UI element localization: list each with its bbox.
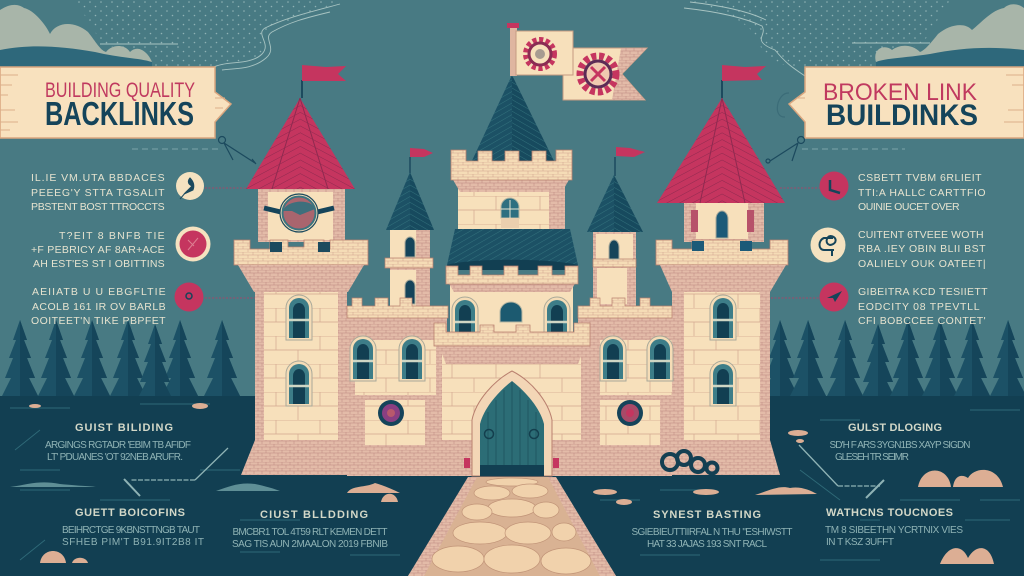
- caption: gulst dloging: [830, 422, 970, 463]
- right text block 3: [858, 286, 988, 327]
- front battlement: [434, 323, 590, 346]
- left text block 2: AH EST'ES ST I OBITTINS: [33, 258, 165, 270]
- caption: ciust blldding: SAG TIS AUN 2MAALON 2019 FBNIB: [232, 539, 388, 550]
- left wing: [347, 298, 448, 476]
- key right: [766, 93, 905, 163]
- key left: [132, 136, 256, 164]
- caption: guett boicofins: GUETT BOICOFINS: [75, 507, 185, 519]
- forest right: [762, 320, 1024, 400]
- right small flag: [615, 147, 645, 176]
- keep body: [450, 282, 573, 340]
- gate posts: [464, 458, 559, 468]
- left tower body: [241, 268, 363, 475]
- right tower: [656, 65, 788, 475]
- left text block 3: ACOLB 161 IR OV BARLB: [32, 301, 166, 313]
- ground: [0, 396, 1024, 576]
- right banner heading: BROKEN LINK: [823, 79, 977, 106]
- icon: crimson hook: [820, 172, 848, 200]
- left text block 1: IL.IE VM.UTA BBDACES: [31, 172, 165, 184]
- left banner heading: BUILDING QUALITY: [45, 79, 195, 102]
- dotted connectors left: [205, 188, 278, 298]
- right text block 3: EODCITY 08 TPEVTLL: [858, 301, 980, 313]
- caption: synest basting: [632, 509, 792, 550]
- right text block 2: [858, 229, 986, 270]
- caption: wathcns touchoes: TM 8 SIBEETHN YCRTNIX VIES: [825, 525, 963, 536]
- center window: [501, 198, 519, 228]
- left text block 3: AEIIATB U U EBGFLTIE: [32, 286, 166, 298]
- right text block 3: GIBEITRA KCD TESIIETT: [858, 286, 988, 298]
- caption: wathcns touchoes: [825, 507, 963, 548]
- left tower roof: [246, 98, 355, 189]
- center spire: [470, 75, 556, 165]
- gate arch: [472, 371, 552, 476]
- caption: guett boicofins: [62, 507, 204, 548]
- left text block 1: PEEEG'Y STTA TGSALIT: [31, 187, 165, 199]
- caption: ciust blldding: [232, 509, 388, 550]
- swallowtail flag: [563, 48, 647, 100]
- gear two: [580, 56, 616, 92]
- right tower battlement: [656, 240, 788, 292]
- left banner heading: BACKLINKS: [45, 95, 194, 132]
- caption: wathcns touchoes: IN T KSZ 3UFFT: [826, 537, 894, 548]
- icon: leaf: [176, 172, 204, 200]
- caption: guett boicofins: BEIHRCTGE 9KBNSTTNGB TAUT: [62, 525, 200, 536]
- left small flag: [410, 148, 433, 176]
- left banner: [0, 67, 231, 138]
- dotted connectors right: [750, 188, 820, 298]
- caption: guett boicofins: SFHEB PIM'T B91.9IT2B8 IT: [62, 537, 204, 548]
- gate block: [434, 323, 590, 476]
- left text block 1: [31, 172, 165, 213]
- caption: guist building: [45, 422, 191, 463]
- right banner: [789, 67, 1024, 138]
- caption: synest basting: SGIEBIEUTTIIRFAL N THU "ESHIWSTT: [632, 527, 792, 538]
- icon: link glyph: [810, 228, 846, 262]
- caption: wathcns touchoes: WATHCNS TOUCNOES: [826, 507, 953, 519]
- keep battlement: [446, 266, 578, 284]
- wing windows: [350, 336, 673, 381]
- caption: guist building: GUIST BILIDING: [75, 422, 173, 434]
- right text block 2: RBA .IEY OBIN BLII BST: [858, 243, 986, 255]
- right tower flag: [722, 65, 766, 98]
- left tower windows: [286, 295, 312, 340]
- top flags: [507, 23, 647, 100]
- pole: [507, 23, 519, 76]
- left tower battlement: [234, 240, 368, 292]
- right text block 3: CFI BOBCCEE CONTET': [858, 315, 986, 327]
- caption: gulst dloging: SD'H F ARS 3YGN1BS XAYP SIGDN: [830, 440, 970, 451]
- keep windows: [452, 297, 570, 342]
- left small windows: [405, 237, 415, 304]
- right text block 2: CUITENT 6TVEEE WOTH: [858, 229, 984, 241]
- caption: gulst dloging: GULST DLOGING: [848, 422, 942, 434]
- caption: gulst dloging: GLESEH TR SEIMR: [835, 452, 909, 463]
- right small roof: [587, 175, 643, 232]
- medallion left: [378, 400, 404, 426]
- gear one: [526, 40, 554, 68]
- caption: ciust blldding: CIUST BLLDDING: [260, 509, 368, 521]
- cloud and mountains right: [875, 4, 1024, 67]
- left text block 3: OOITEET'N TIKE PBPFET: [31, 315, 166, 327]
- right tower upper window: [691, 210, 754, 238]
- caption: ciust blldding: BMCBR1 TOL 4T59 RLT KEMEN DETT: [232, 527, 388, 538]
- right tower windows: [710, 295, 736, 340]
- left text block 2: +F PEBRICY AF 8AR+ACE: [31, 244, 165, 256]
- right text block 2: OALIIELY OUK OATEET|: [858, 258, 986, 270]
- connector arrow left: [124, 448, 228, 496]
- gate door: [480, 381, 544, 476]
- center battlement: [451, 150, 572, 180]
- dotted sky texture right: [690, 0, 950, 68]
- center tower body: [458, 178, 565, 232]
- medallion right: [617, 400, 643, 426]
- banner flag: [516, 31, 573, 75]
- dotted sky texture left: [75, 0, 340, 68]
- connector arrow right: [799, 445, 884, 498]
- right text block 1: TTI:A HALLC CARTTFIO: [858, 187, 986, 199]
- icon: target: [174, 282, 204, 312]
- caption: guist building: ARGINGS RGTADR 'EBIM TB AFIDF: [45, 440, 191, 451]
- left tower clock window: [264, 194, 334, 232]
- cloud and mountains left: [0, 5, 152, 67]
- icon: crimson medal: [176, 226, 210, 262]
- rocks: [29, 403, 1003, 564]
- left small tower: [385, 148, 434, 310]
- wind lines left: [100, 4, 340, 70]
- icon: paper plane: [820, 282, 848, 312]
- caption: guist building: LT' PDUANES 'OT 92NEB ARUFR.: [47, 452, 183, 463]
- left tower: [234, 65, 368, 475]
- right text block 1: [858, 172, 986, 213]
- center tower: [446, 75, 578, 340]
- left text block 2: T?EIT 8 BNFB TIE: [59, 230, 165, 242]
- right small window: [609, 240, 619, 259]
- right text block 1: CSBETT TVBM 6RLIEIT: [858, 172, 982, 184]
- right tower body: [660, 268, 780, 475]
- right wing: [578, 298, 672, 476]
- left text block 1: PBSTENT BOST TTROCCTS: [31, 201, 165, 213]
- right small tower: [587, 147, 645, 308]
- left tower flag: [302, 65, 346, 98]
- left text block 2: [31, 230, 165, 270]
- chain pile: [662, 451, 718, 474]
- mansard roof: [447, 229, 578, 265]
- right banner heading: [823, 79, 978, 132]
- right tower roof: [657, 98, 785, 203]
- caption: synest basting: SYNEST BASTING: [653, 509, 761, 521]
- caption: synest basting: HAT 33 JAJAS 193 SNT RACL: [647, 539, 767, 550]
- left small roof: [386, 172, 434, 230]
- right text block 1: OUINIE OUCET OVER: [858, 201, 960, 213]
- wind lines right: [684, 2, 930, 76]
- right banner heading: BUILDINKS: [826, 99, 978, 132]
- forest left: [2, 320, 240, 400]
- left text block 3: [31, 286, 166, 327]
- stone path: [408, 477, 616, 576]
- left banner heading: [45, 79, 195, 132]
